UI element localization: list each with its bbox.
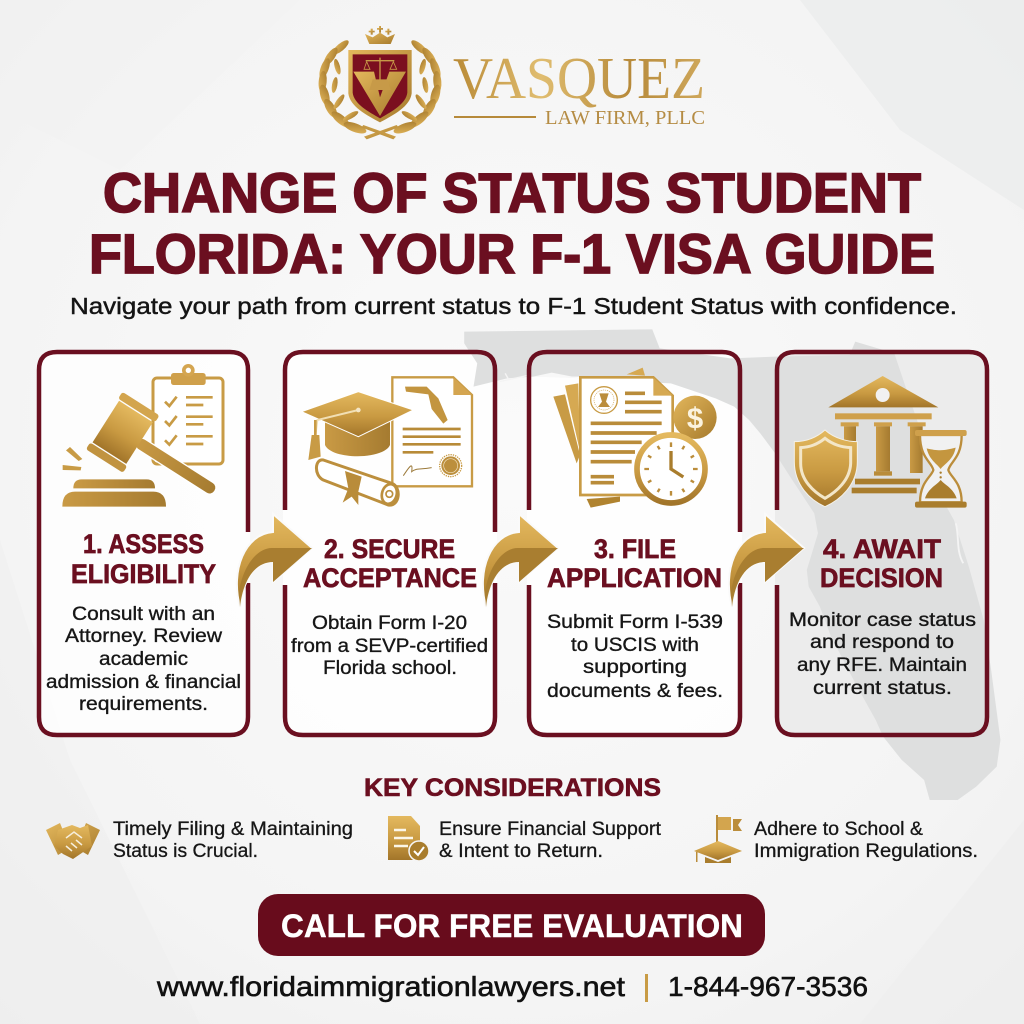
consideration: timely filing bbox=[46, 818, 353, 862]
title: CHANGE OF STATUS STUDENT bbox=[103, 161, 921, 224]
call to action button bbox=[258, 894, 765, 956]
arrow: step 1 to step 2 bbox=[237, 514, 312, 607]
body text: Submit Form I-539 bbox=[547, 611, 723, 633]
body text bbox=[291, 612, 488, 679]
body text: Attorney. Review bbox=[65, 625, 223, 647]
heading: 2. SECURE bbox=[324, 534, 455, 564]
footer contact line: 1-844-967-3536 bbox=[668, 971, 868, 1002]
text: & Intent to Return. bbox=[439, 840, 603, 862]
body text: Obtain Form I-20 bbox=[312, 612, 467, 634]
body text: from a SEVP-certified bbox=[291, 635, 488, 657]
arrow: step 3 to step 4 bbox=[729, 514, 804, 607]
wordmark: VASQUEZ bbox=[453, 45, 705, 111]
text: Ensure Financial Support bbox=[439, 818, 662, 840]
logo: Vasquez Law Firm bbox=[317, 26, 705, 139]
icon: document with check bbox=[388, 816, 429, 861]
body text bbox=[547, 611, 723, 702]
body text bbox=[46, 603, 241, 715]
card border bbox=[777, 352, 987, 735]
text bbox=[113, 818, 353, 862]
background map of Florida bbox=[464, 329, 1000, 800]
heading: ELIGIBILITY bbox=[71, 559, 216, 589]
body text: to USCIS with bbox=[571, 634, 699, 656]
text: Timely Filing & Maintaining bbox=[113, 818, 353, 840]
icon: documents, coin and clock: $ bbox=[687, 402, 703, 435]
body text: Consult with an bbox=[72, 603, 215, 625]
body text: documents & fees. bbox=[547, 680, 723, 702]
icon: laurel wreath bbox=[317, 38, 443, 139]
call to action button: CALL FOR FREE EVALUATION bbox=[281, 908, 743, 944]
heading: key considerations: KEY CONSIDERATIONS bbox=[364, 774, 661, 802]
icon: flag and graduation cap bbox=[694, 815, 742, 863]
subtitle: Navigate your path from current status to F-1 Student Status with confidence. bbox=[70, 293, 957, 319]
text bbox=[754, 818, 978, 862]
icon: gavel and clipboard bbox=[62, 364, 233, 520]
card border bbox=[39, 352, 248, 735]
panel: step 4 await decision bbox=[777, 352, 987, 735]
body text: current status. bbox=[813, 677, 952, 699]
icon: crown bbox=[365, 26, 395, 44]
panel: step 1 assess eligibility bbox=[39, 352, 248, 735]
consideration: school regulations bbox=[694, 815, 978, 863]
icon: laurel crest bbox=[317, 26, 443, 139]
heading bbox=[547, 534, 722, 593]
body text: and respond to bbox=[810, 631, 954, 653]
icon: documents, coin and clock bbox=[553, 368, 717, 508]
body text: academic bbox=[99, 648, 188, 670]
footer contact line bbox=[156, 971, 868, 1002]
icon: graduation cap, diploma, Florida certificate bbox=[302, 377, 472, 506]
panel: step 2 secure acceptance bbox=[285, 352, 495, 735]
body text: Monitor case status bbox=[789, 609, 976, 631]
icon: courthouse, shield and hourglass bbox=[794, 376, 967, 508]
arrow: step 2 to step 3 bbox=[483, 514, 558, 607]
text: Adhere to School & bbox=[754, 818, 923, 840]
panel fills for the four step cards bbox=[37, 350, 989, 737]
body text bbox=[789, 609, 976, 699]
body text: Florida school. bbox=[323, 657, 457, 679]
heading: ACCEPTANCE bbox=[303, 563, 477, 593]
body text: supporting bbox=[583, 656, 687, 678]
heading: DECISION bbox=[820, 563, 943, 593]
icon: shield bbox=[348, 50, 412, 122]
consideration: financial support bbox=[388, 816, 662, 862]
title: FLORIDA: YOUR F-1 VISA GUIDE bbox=[89, 222, 935, 285]
body text: any RFE. Maintain bbox=[797, 654, 967, 676]
body text: admission & financial bbox=[46, 671, 241, 693]
heading bbox=[303, 534, 477, 593]
heading bbox=[820, 534, 943, 593]
divider line and tagline: LAW FIRM, PLLC bbox=[545, 107, 705, 129]
heading: 4. AWAIT bbox=[823, 534, 942, 564]
title bbox=[89, 161, 935, 285]
card border bbox=[529, 352, 740, 735]
text: Status is Crucial. bbox=[113, 840, 258, 862]
footer contact line: www.floridaimmigrationlawyers.net bbox=[156, 971, 625, 1002]
heading: 3. FILE bbox=[594, 534, 676, 564]
text: Immigration Regulations. bbox=[754, 840, 978, 862]
heading: 1. ASSESS bbox=[83, 529, 204, 559]
text bbox=[439, 818, 662, 862]
icon: handshake bbox=[46, 823, 100, 859]
panel: step 3 file application bbox=[529, 352, 740, 735]
heading: APPLICATION bbox=[547, 563, 722, 593]
body text: requirements. bbox=[79, 693, 208, 715]
card border bbox=[285, 352, 495, 735]
heading bbox=[71, 529, 216, 589]
